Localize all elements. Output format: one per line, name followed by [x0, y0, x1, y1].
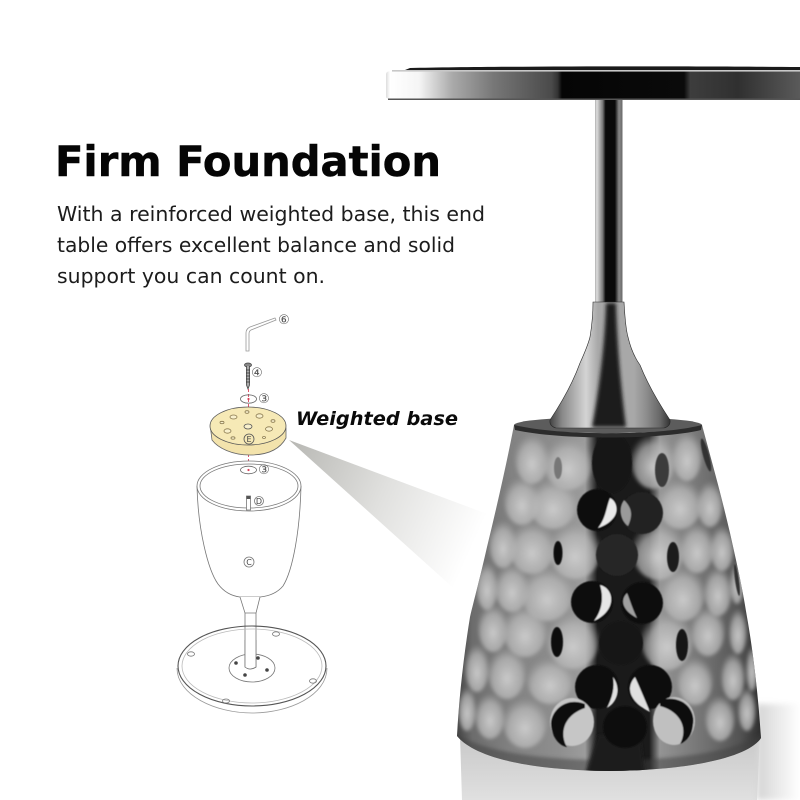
description text: [57, 202, 485, 288]
part E: yellow weighted disc: [210, 407, 286, 455]
hammered dimples: [450, 429, 770, 775]
part C: cup body: [197, 461, 301, 597]
part 3: lower washer: [240, 463, 270, 478]
description text: With a reinforced weighted base, this end: [57, 202, 485, 226]
part C: cup body: C: [246, 558, 252, 567]
pole: [595, 100, 622, 303]
stem: [240, 597, 260, 669]
dashed assembly axis: [248, 389, 250, 497]
table top: [386, 66, 800, 100]
flared neck: [550, 302, 670, 428]
description text: support you can count on.: [57, 264, 325, 288]
part 3: lower washer: ③: [258, 463, 270, 478]
weighted base label: Weighted base: [296, 408, 458, 430]
description text: table offers excellent balance and solid: [57, 233, 455, 257]
base top rim: [514, 417, 702, 438]
part 6: hex key: [246, 313, 290, 351]
round base plate: [177, 626, 327, 713]
title: Firm Foundation: [55, 137, 441, 186]
exploded assembly diagram: [177, 313, 327, 713]
part D: bolt in cup: [246, 496, 264, 510]
part 3: upper washer: ③: [258, 392, 270, 407]
hammered base: [450, 425, 770, 775]
part E: yellow weighted disc: E: [246, 435, 252, 444]
part 6: hex key: ⑥: [278, 313, 290, 328]
part 4: screw: [244, 363, 263, 389]
part 3: upper washer: [240, 392, 270, 407]
callout beam from weighted base diagram to table base: [289, 440, 490, 612]
floor shadow under table: [460, 704, 800, 800]
part 4: screw: ④: [251, 366, 263, 381]
part D: bolt in cup: D: [256, 497, 262, 506]
